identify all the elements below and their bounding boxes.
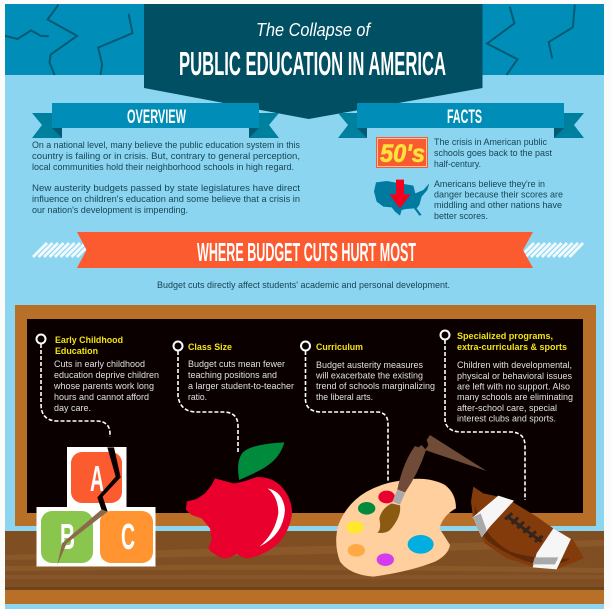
fact text: scores: Americans believe they're in [434,179,545,190]
item: class size [174,342,294,453]
wooden desk [5,531,604,604]
item: curriculum: will exacerbate the existing [315,370,423,382]
overview text: our nation's development is impending. [32,205,188,216]
icon: torn football [471,487,584,569]
icon: US map with down arrow [374,180,429,216]
item: class size: ratio. [188,392,207,403]
item: specialized programs: interest clubs and sports. [457,414,556,424]
fact text: half-century [434,137,552,170]
item: early childhood education: whose parents work long [53,381,154,392]
icon: bitten apple [186,442,292,558]
item: specialized programs: are left with no support. Also [457,382,570,392]
fact text: half-century: schools goes back to the past [434,148,552,159]
where budget cuts hurt most banner [77,232,533,268]
item: specialized programs: Specialized programs, [457,331,553,342]
item: curriculum: the liberal arts. [316,392,373,403]
item: curriculum: Budget austerity measures [316,360,423,371]
icon: ABC blocks with crack: A [90,458,104,499]
fact text: half-century: The crisis in American public [434,137,547,148]
item: specialized programs: Children with developmental, [457,360,572,371]
fact text: scores [434,179,563,222]
fact text: scores: danger because their scores are [434,190,563,200]
item: curriculum: Curriculum [316,342,363,353]
item: specialized programs [440,330,573,500]
section subtitle: Budget cuts directly affect students' academic and personal development. [157,280,450,291]
item: class size: a larger student-to-teacher [188,381,294,392]
item: early childhood education: Early Childhood [55,335,123,346]
top band with cracks [5,4,604,75]
overview ribbon [32,103,279,138]
item: class size: Class Size [188,342,232,353]
item: specialized programs: many schools are eliminating [457,392,573,403]
item: curriculum: trend of schools marginalizing [316,381,435,392]
fact text: half-century: half-century. [434,159,481,170]
overview text: On a national level, many believe the public education system in this [32,140,300,151]
item: early childhood education: education deprive children [54,370,159,381]
icon: ABC blocks with crack: B [60,516,75,557]
icon: ABC blocks with crack [36,447,156,566]
item: specialized programs: after-school care, special [457,403,557,414]
overview text [32,140,300,216]
icon: paint palette and broken brush [336,435,487,577]
icon: ABC blocks with crack: C [121,516,135,557]
title banner [144,4,482,119]
item: curriculum [301,342,435,481]
hatched stripes beside banner [33,243,583,257]
overview ribbon: OVERVIEW [127,106,186,128]
item: early childhood education [36,334,159,437]
item: specialized programs: extra-curriculars & sports [457,342,567,353]
item: specialized programs: physical or behavioral issues [457,371,572,382]
facts ribbon [338,103,584,138]
overview text: country is failing or in crisis. But, contrary to general perception, [32,151,300,162]
overview text: influence on children's education and some believe that a crisis in [32,194,300,205]
item: class size: Budget cuts mean fewer [188,359,285,370]
item: early childhood education: hours and cannot afford [54,392,149,403]
overview text: New austerity budgets passed by state legislatures have direct [32,183,300,194]
item: early childhood education: Education [55,346,98,357]
icon: 50's badge: 50's [380,140,425,168]
item: early childhood education: Cuts in early childhood [54,359,145,370]
overview text: local communities hold their neighborhood schools in high regard. [32,162,294,173]
item: class size: teaching positions and [188,370,277,381]
title banner: The Collapse of [256,20,372,40]
fact text: scores: middling and other nations have [434,200,562,211]
item: early childhood education: day care. [54,403,91,414]
facts ribbon: FACTS [447,106,482,128]
chalkboard [15,305,596,526]
fact text: scores: better scores. [434,211,488,222]
